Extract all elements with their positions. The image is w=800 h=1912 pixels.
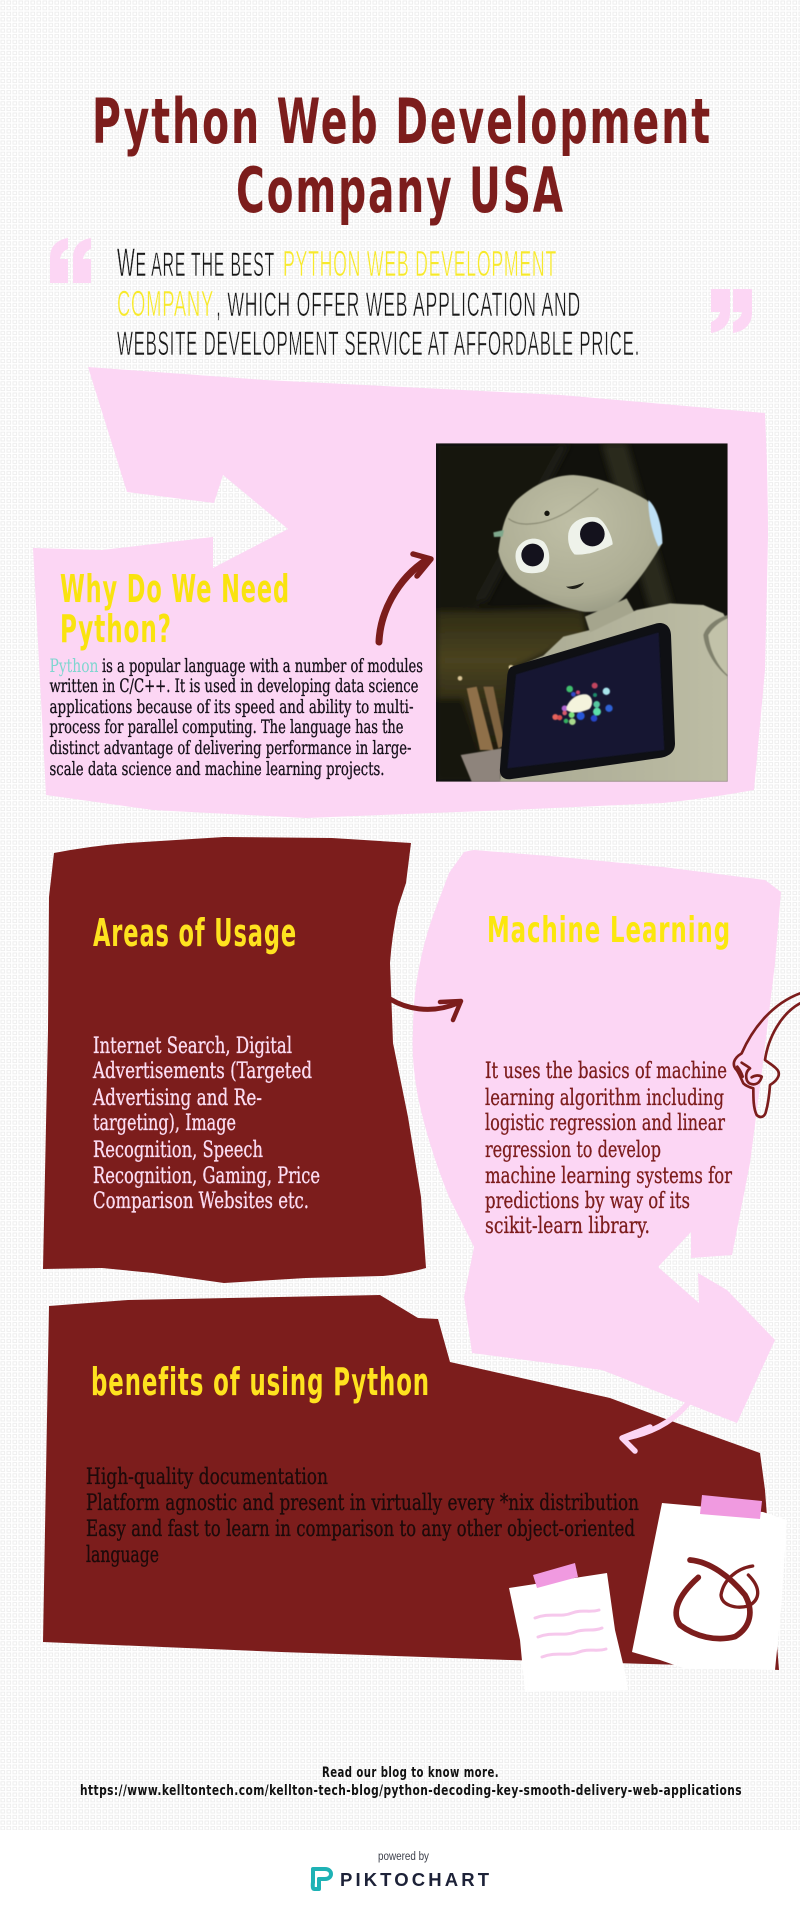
text: python description: scale data science and machine learning projects. [50, 759, 384, 780]
text: benefits list: Easy and fast to learn in comparison to any other object-oriented [86, 1517, 635, 1542]
panel: why do we need python [33, 367, 768, 818]
footer: powered by piktochart [0, 1830, 800, 1912]
intro text: WE ARE THE BEST [117, 241, 275, 285]
text: python description: process for parallel computing. The language has the [50, 717, 404, 738]
footer text: Read our blog to know more. [322, 1765, 499, 1781]
robot body [500, 603, 728, 782]
icon: large sticky note [632, 1495, 787, 1670]
icon: small sticky note [509, 1563, 628, 1692]
arrow: to photo [379, 554, 431, 642]
text: benefits list: language [86, 1543, 159, 1568]
photo: robot [436, 443, 728, 782]
text: areas list [92, 1034, 320, 1214]
text: machine learning description: predictions by way of its [485, 1189, 690, 1214]
heading: why do we need python: Why Do We Need [60, 567, 290, 611]
text: machine learning description: scikit-learn library. [485, 1214, 650, 1239]
text: python description: distinct advantage of delivering performance in large- [50, 738, 412, 759]
icon: opening quote mark [50, 238, 91, 283]
title [92, 85, 712, 227]
powered by label: powered by [378, 1851, 429, 1863]
robot neck [585, 598, 634, 632]
heading: why do we need python [60, 567, 290, 651]
heading: areas of usage: Areas of Usage [93, 911, 297, 955]
note squiggle [676, 1560, 758, 1639]
panel: machine learning [413, 850, 781, 1423]
intro text [117, 241, 640, 363]
text: benefits list [86, 1465, 639, 1568]
text: python description: applications because of its speed and ability to multi- [50, 697, 414, 718]
heading: why do we need python: Python? [60, 607, 172, 651]
note tape [533, 1563, 578, 1588]
text: areas list: Advertisements (Targeted [92, 1059, 312, 1084]
intro text: COMPANY [117, 283, 214, 324]
text: areas list: targeting), Image [93, 1111, 236, 1136]
text: areas list: Advertising and Re- [92, 1086, 262, 1111]
text: machine learning description: regression to develop [485, 1138, 661, 1163]
note tape [700, 1495, 762, 1519]
text: python description: is a popular language with a number of modules [102, 656, 423, 677]
tablet lights [552, 683, 613, 725]
arrow: areas to machine learning [390, 999, 461, 1020]
text: areas list: Recognition, Speech [93, 1138, 263, 1163]
text: areas list: Recognition, Gaming, Price [93, 1164, 320, 1189]
piktochart wordmark: PIKTOCHART [340, 1869, 490, 1890]
icon: pointing hand [734, 993, 800, 1117]
robot face [515, 539, 549, 573]
icon: closing quote mark [711, 289, 752, 333]
text: benefits list: Platform agnostic and present in virtually every *nix distribution [86, 1491, 639, 1516]
text: areas list: Comparison Websites etc. [93, 1189, 309, 1214]
text: python description: written in C/C++. It is used in developing data science [50, 676, 419, 697]
text: benefits list: High-quality documentation [86, 1465, 328, 1490]
title: Company USA [236, 154, 565, 227]
icon: piktochart logo [313, 1869, 331, 1889]
text: areas list: Internet Search, Digital [93, 1034, 292, 1059]
panel: benefits of using python [43, 1295, 779, 1670]
text: machine learning description: learning algorithm including [485, 1086, 724, 1111]
text: machine learning description: It uses the basics of machine [485, 1059, 727, 1084]
text: machine learning description [485, 1059, 732, 1239]
panel: areas of usage [43, 837, 426, 1283]
text: python description: Python [50, 656, 99, 677]
robot tablet [500, 623, 675, 779]
heading: benefits: benefits of using Python [91, 1360, 430, 1404]
text: python description [50, 656, 423, 780]
note lines [535, 1610, 606, 1657]
arrow: machine learning to benefits [622, 1402, 689, 1451]
footer text [80, 1765, 742, 1799]
robot head [498, 475, 662, 612]
